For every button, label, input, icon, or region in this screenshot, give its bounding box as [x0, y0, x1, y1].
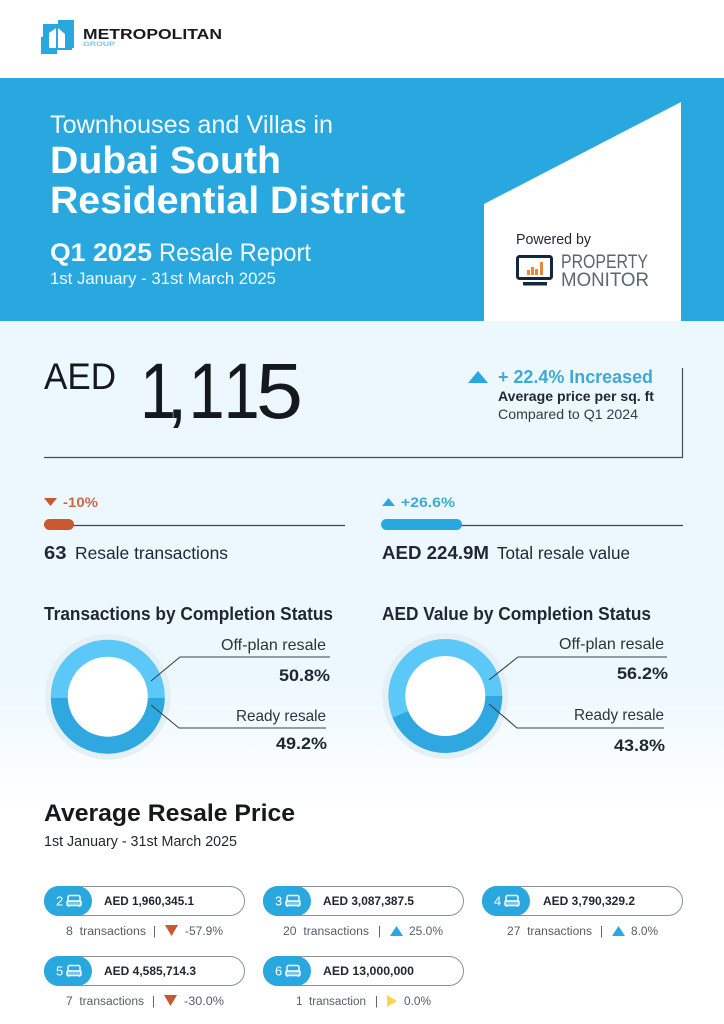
card: 3 bedroom: 25.0%	[409, 926, 443, 938]
card: 3 bedroom	[263, 886, 464, 938]
stat: total resale value: Total resale value	[497, 543, 630, 563]
donut chart	[45, 634, 171, 760]
heading: average resale price: 1st January - 31st March 2025	[44, 834, 237, 850]
card: 3 bedroom: AED 3,087,387.5	[323, 894, 414, 908]
callout: price change	[44, 367, 682, 458]
card: 5 bedroom	[44, 956, 244, 1008]
panel: AED value by completion status: 56.2%	[617, 664, 668, 683]
callout: price change: Average price per sq. ft	[498, 388, 654, 404]
report period	[50, 239, 311, 288]
card: 5 bedroom: AED 4,585,714.3	[104, 964, 196, 978]
panel: AED value by completion status: 43.8%	[614, 736, 665, 755]
card: 6 bedroom: AED 13,000,000	[323, 964, 414, 978]
card: 6 bedroom: 6	[275, 964, 282, 978]
card: 2 bedroom: |	[153, 926, 156, 938]
stat: total resale value: AED 224.9M	[382, 543, 489, 563]
card: 2 bedroom: 8 transactions	[66, 926, 146, 938]
logo: Metropolitan Group	[41, 20, 222, 54]
card: 4 bedroom: 27 transactions	[507, 926, 592, 938]
card: 3 bedroom: |	[378, 926, 381, 938]
panel: transactions by completion status: 50.8%	[279, 666, 330, 685]
panel: AED value by completion status	[382, 604, 668, 759]
card: 2 bedroom: -57.9%	[185, 926, 223, 938]
card: 4 bedroom	[482, 886, 682, 938]
headline price: 1	[140, 348, 176, 435]
heading: average resale price	[44, 800, 295, 850]
panel: transactions by completion status: Off-plan resale	[221, 637, 326, 654]
donut chart	[382, 633, 508, 759]
report period: Resale Report	[159, 239, 311, 267]
card: 5 bedroom: -30.0%	[184, 996, 224, 1008]
card: 5 bedroom: 5	[56, 964, 63, 978]
headline price: 5	[256, 348, 303, 435]
headline price: 1	[189, 348, 225, 435]
card: 2 bedroom: 2	[56, 894, 63, 908]
panel: AED value by completion status: Ready resale	[574, 707, 664, 724]
headline price: AED	[44, 356, 116, 397]
stat: resale transactions	[44, 495, 345, 563]
logo: Metropolitan Group: GROUP	[83, 42, 115, 48]
panel: transactions by completion status: Transactions by Completion Status	[44, 604, 333, 624]
title: Residential District	[50, 180, 405, 222]
card: 6 bedroom: 0.0%	[404, 996, 431, 1008]
card: 3 bedroom: 3	[275, 894, 282, 908]
card: 6 bedroom: 1 transaction	[296, 996, 366, 1008]
icon: monitor	[518, 256, 552, 286]
headline price	[44, 346, 303, 435]
card: 5 bedroom: |	[152, 996, 155, 1008]
stat: total resale value	[381, 495, 683, 563]
headline price: ,	[166, 346, 188, 435]
panel: transactions by completion status: 49.2%	[276, 734, 327, 753]
panel: transactions by completion status: Ready resale	[236, 708, 326, 725]
panel: powered by: MONITOR	[561, 270, 649, 291]
light section background	[0, 321, 724, 810]
card: 4 bedroom: 4	[494, 894, 501, 908]
report period: 1st January - 31st March 2025	[50, 269, 276, 288]
panel: AED value by completion status: AED Value by Completion Status	[382, 604, 651, 624]
stat: resale transactions: -10%	[63, 495, 98, 510]
logo: Metropolitan Group: METROPOLITAN	[83, 26, 222, 43]
panel: powered by: Powered by	[516, 232, 592, 248]
title	[50, 111, 405, 222]
card: 3 bedroom: 20 transactions	[283, 926, 369, 938]
panel: powered by: PROPERTY	[561, 252, 648, 273]
heading: average resale price: Average Resale Price	[44, 800, 295, 827]
title: Dubai South	[50, 140, 281, 182]
card: 6 bedroom: |	[375, 996, 378, 1008]
header band	[0, 78, 724, 321]
callout: price change: + 22.4% Increased	[498, 367, 653, 387]
panel: AED value by completion status: Off-plan resale	[559, 636, 664, 653]
panel: transactions by completion status	[44, 604, 333, 760]
card: 6 bedroom	[263, 956, 464, 1008]
card: 4 bedroom: 8.0%	[631, 926, 658, 938]
report period: Q1 2025	[50, 239, 152, 267]
card: 4 bedroom: AED 3,790,329.2	[543, 894, 635, 908]
callout: price change: Compared to Q1 2024	[498, 406, 638, 422]
headline price: 1	[224, 348, 260, 435]
stat: resale transactions: 63	[44, 542, 66, 563]
stat: total resale value: +26.6%	[401, 495, 455, 510]
card: 5 bedroom: 7 transactions	[66, 996, 144, 1008]
stat: resale transactions: Resale transactions	[75, 543, 228, 563]
card: 2 bedroom: AED 1,960,345.1	[104, 894, 194, 908]
title: Townhouses and Villas in	[50, 111, 333, 139]
card: 2 bedroom	[44, 886, 244, 938]
panel: powered by	[484, 102, 681, 321]
card: 4 bedroom: |	[600, 926, 603, 938]
